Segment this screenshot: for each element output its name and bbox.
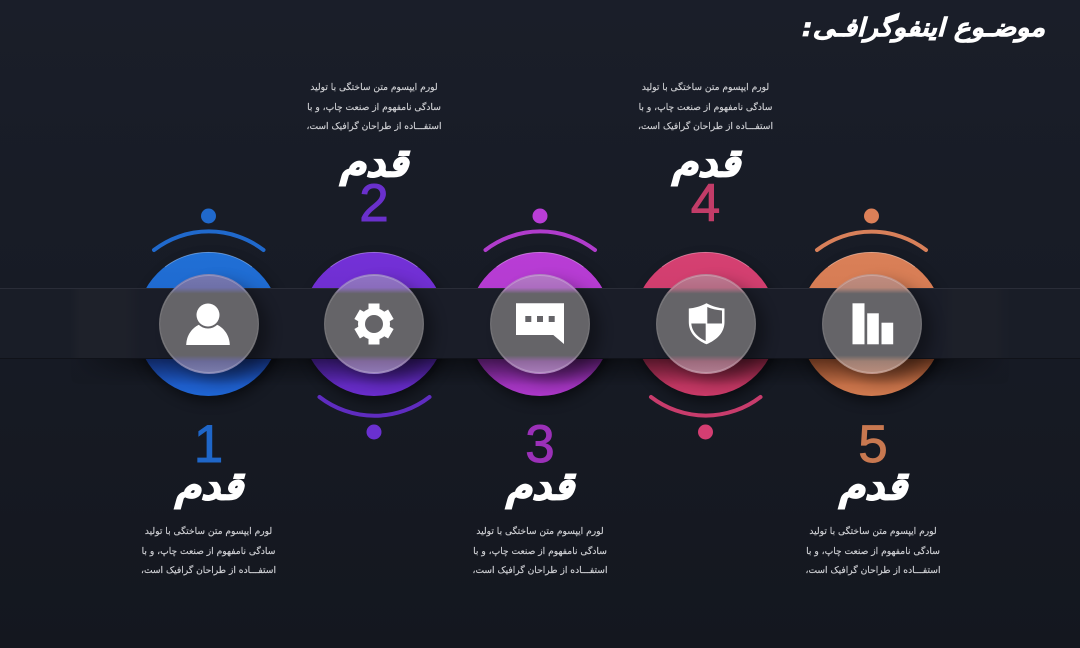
word step: قدم bbox=[175, 464, 242, 508]
description bbox=[141, 526, 276, 576]
step 1 circle bbox=[136, 208, 280, 396]
step 3 circle bbox=[468, 208, 612, 396]
description: استفـــاده از طراحان گرافیک است، bbox=[638, 122, 773, 132]
description bbox=[638, 82, 773, 132]
glass disc 1 with user icon bbox=[158, 274, 258, 374]
step 2 circle bbox=[302, 252, 446, 440]
description: استفـــاده از طراحان گرافیک است، bbox=[306, 122, 441, 132]
step 4 text bbox=[638, 82, 773, 233]
description bbox=[472, 526, 607, 576]
step 3 text bbox=[472, 415, 607, 576]
glass disc 5 with bar chart icon bbox=[822, 274, 922, 374]
description bbox=[306, 82, 441, 132]
description: استفـــاده از طراحان گرافیک است، bbox=[806, 566, 940, 576]
number 4: 4 bbox=[691, 174, 720, 233]
step 5 text bbox=[806, 415, 940, 576]
step 2 text bbox=[306, 82, 441, 233]
step 5 circle bbox=[800, 208, 944, 396]
description bbox=[806, 526, 940, 576]
description: لورم ایپسوم متن ساختگی با تولید bbox=[809, 527, 937, 537]
description: لورم ایپسوم متن ساختگی با تولید bbox=[642, 83, 769, 93]
number 1: 1 bbox=[194, 415, 223, 474]
title: موضـوع اینفوگرافـی: bbox=[802, 13, 1045, 42]
description: لورم ایپسوم متن ساختگی با تولید bbox=[145, 527, 272, 537]
description: سادگی نامفهوم از صنعت چاپ، و با bbox=[307, 103, 441, 113]
step 1 text bbox=[141, 415, 276, 576]
glass disc 2 with gear icon bbox=[324, 274, 424, 374]
number 2: 2 bbox=[359, 174, 389, 233]
band shadow bbox=[110, 359, 970, 382]
glass disc 3 with chat icon bbox=[490, 274, 590, 374]
word step: قدم bbox=[839, 464, 907, 508]
description: لورم ایپسوم متن ساختگی با تولید bbox=[476, 527, 604, 537]
step 4 circle bbox=[634, 252, 778, 440]
description: استفـــاده از طراحان گرافیک است، bbox=[472, 566, 607, 576]
number 3: 3 bbox=[525, 415, 555, 474]
glass disc 4 with shield icon bbox=[656, 274, 756, 374]
horizontal band bbox=[0, 288, 1080, 359]
word step: قدم bbox=[672, 141, 739, 185]
description: لورم ایپسوم متن ساختگی با تولید bbox=[310, 83, 438, 93]
description: سادگی نامفهوم از صنعت چاپ، و با bbox=[639, 103, 772, 113]
number 5: 5 bbox=[858, 415, 888, 474]
description: سادگی نامفهوم از صنعت چاپ، و با bbox=[473, 547, 607, 557]
description: سادگی نامفهوم از صنعت چاپ، و با bbox=[142, 547, 275, 557]
description: سادگی نامفهوم از صنعت چاپ، و با bbox=[806, 547, 940, 557]
description: استفـــاده از طراحان گرافیک است، bbox=[141, 566, 276, 576]
word step: قدم bbox=[340, 141, 408, 185]
word step: قدم bbox=[506, 464, 574, 508]
